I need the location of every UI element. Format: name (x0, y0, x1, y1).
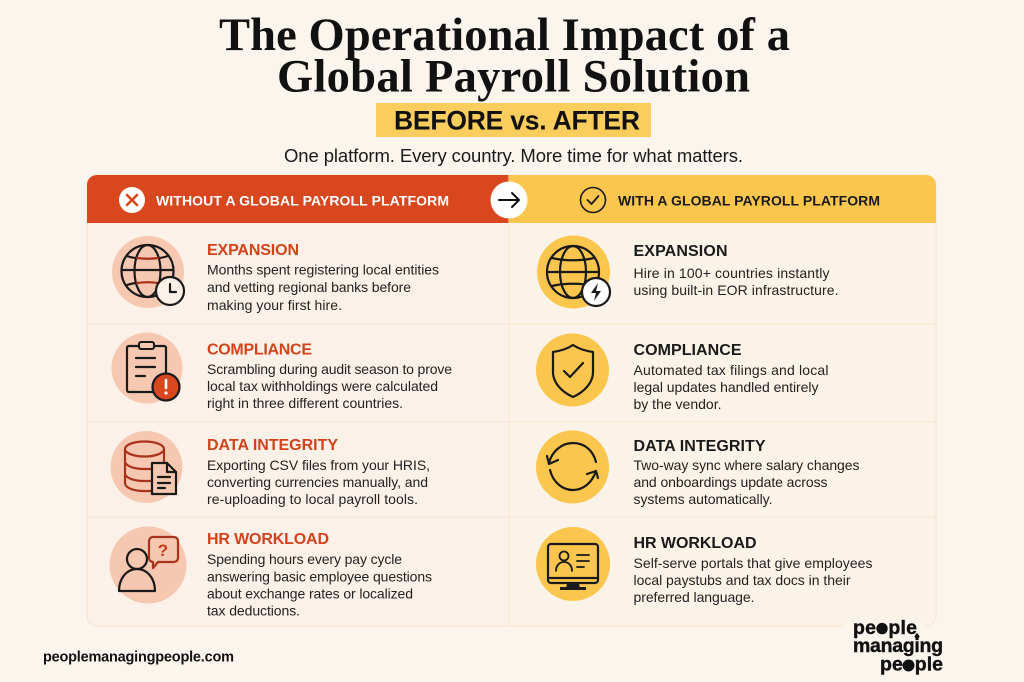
row: data integrity without platform: converting currencies manually, and (207, 474, 428, 490)
row: data integrity with platform: systems automatically. (634, 491, 772, 507)
row: expansion with platform (537, 236, 838, 308)
icon: person with question bubble: ? (158, 541, 168, 560)
row: data integrity with platform: Two-way sync where salary changes (634, 457, 860, 473)
icon: database with document (110, 431, 182, 503)
row: data integrity without platform: Exporting CSV files from your HRIS, (207, 457, 430, 473)
row: compliance with platform: legal updates handled entirely (634, 379, 818, 395)
icon: person with question bubble (110, 526, 186, 604)
row: hr workload with platform: local paystubs and tax docs in their (634, 572, 851, 588)
row: compliance without platform: COMPLIANCE (207, 342, 312, 358)
panel: with a global payroll platform (509, 175, 936, 626)
icon: monitor with employee profile (536, 527, 610, 601)
row: data integrity with platform: DATA INTEGRITY (634, 438, 766, 455)
header: without platform: WITHOUT A GLOBAL PAYROLL PLATFORM (156, 192, 449, 208)
row: hr workload without platform: about exchange rates or localized (207, 586, 413, 602)
icon: globe with clock (112, 236, 184, 308)
logo: people managing people (845, 617, 943, 676)
row: expansion without platform: EXPANSION (207, 242, 299, 259)
row: expansion without platform: Months spent registering local entities (207, 262, 439, 278)
row: expansion with platform: using built-in EOR infrastructure. (634, 282, 838, 298)
row: hr workload with platform: HR WORKLOAD (634, 535, 756, 552)
logo: people managing people: managing (853, 635, 943, 657)
row: hr workload without platform: Spending hours every pay cycle (207, 551, 402, 567)
row: data integrity without platform: re-uploading to local payroll tools. (207, 491, 418, 507)
footer url: peoplemanagingpeople.com (43, 650, 234, 666)
row: data integrity without platform: DATA INTEGRITY (207, 437, 338, 454)
row: hr workload without platform: answering basic employee questions (207, 568, 432, 584)
row: hr workload without platform (110, 526, 432, 618)
row: compliance with platform (536, 334, 828, 412)
tagline: One platform. Every country. More time for what matters. (284, 145, 743, 166)
row: expansion with platform: EXPANSION (634, 243, 728, 260)
subtitle badge: before vs. after: BEFORE vs. AFTER (394, 106, 640, 136)
arrow: before to after (490, 182, 528, 218)
row: expansion without platform: making your first hire. (207, 297, 342, 313)
title: Global Payroll Solution (277, 52, 750, 102)
icon: two-way sync arrows (536, 430, 609, 504)
title (219, 10, 790, 102)
row: compliance without platform: right in three different countries. (207, 395, 403, 411)
icon: clipboard with alert (112, 332, 182, 404)
logo: people managing people: people (853, 617, 917, 639)
title: The Operational Impact of a (219, 10, 790, 61)
row: hr workload with platform: Self-serve portals that give employees (634, 555, 872, 571)
row: expansion without platform (112, 236, 439, 313)
header: with platform: WITH A GLOBAL PAYROLL PLATFORM (618, 192, 880, 208)
row: compliance without platform: Scrambling during audit season to prove (207, 361, 452, 377)
row: hr workload without platform: HR WORKLOAD (207, 531, 329, 548)
row: data integrity with platform (536, 430, 860, 507)
row: hr workload with platform: preferred language. (634, 589, 754, 605)
row: hr workload with platform (536, 527, 872, 605)
row: compliance with platform: COMPLIANCE (634, 342, 742, 359)
row: expansion with platform: Hire in 100+ countries instantly (634, 265, 830, 281)
row: compliance without platform (112, 332, 452, 411)
row: expansion without platform: and vetting regional banks before (207, 279, 411, 295)
row: compliance without platform: local tax withholdings were calculated (207, 378, 438, 394)
header: without platform (87, 175, 509, 223)
row: data integrity without platform (110, 431, 430, 507)
row: compliance with platform: by the vendor. (634, 396, 722, 412)
row: data integrity with platform: and onboardings update across (634, 474, 828, 490)
icon: shield with check (536, 334, 609, 406)
header: with platform (509, 175, 936, 223)
row: hr workload without platform: tax deductions. (207, 602, 300, 618)
panel: without a global payroll platform (87, 175, 509, 626)
icon: globe with lightning bolt (537, 236, 610, 308)
row: compliance with platform: Automated tax filings and local (634, 362, 828, 378)
logo: people managing people: people (880, 654, 943, 676)
